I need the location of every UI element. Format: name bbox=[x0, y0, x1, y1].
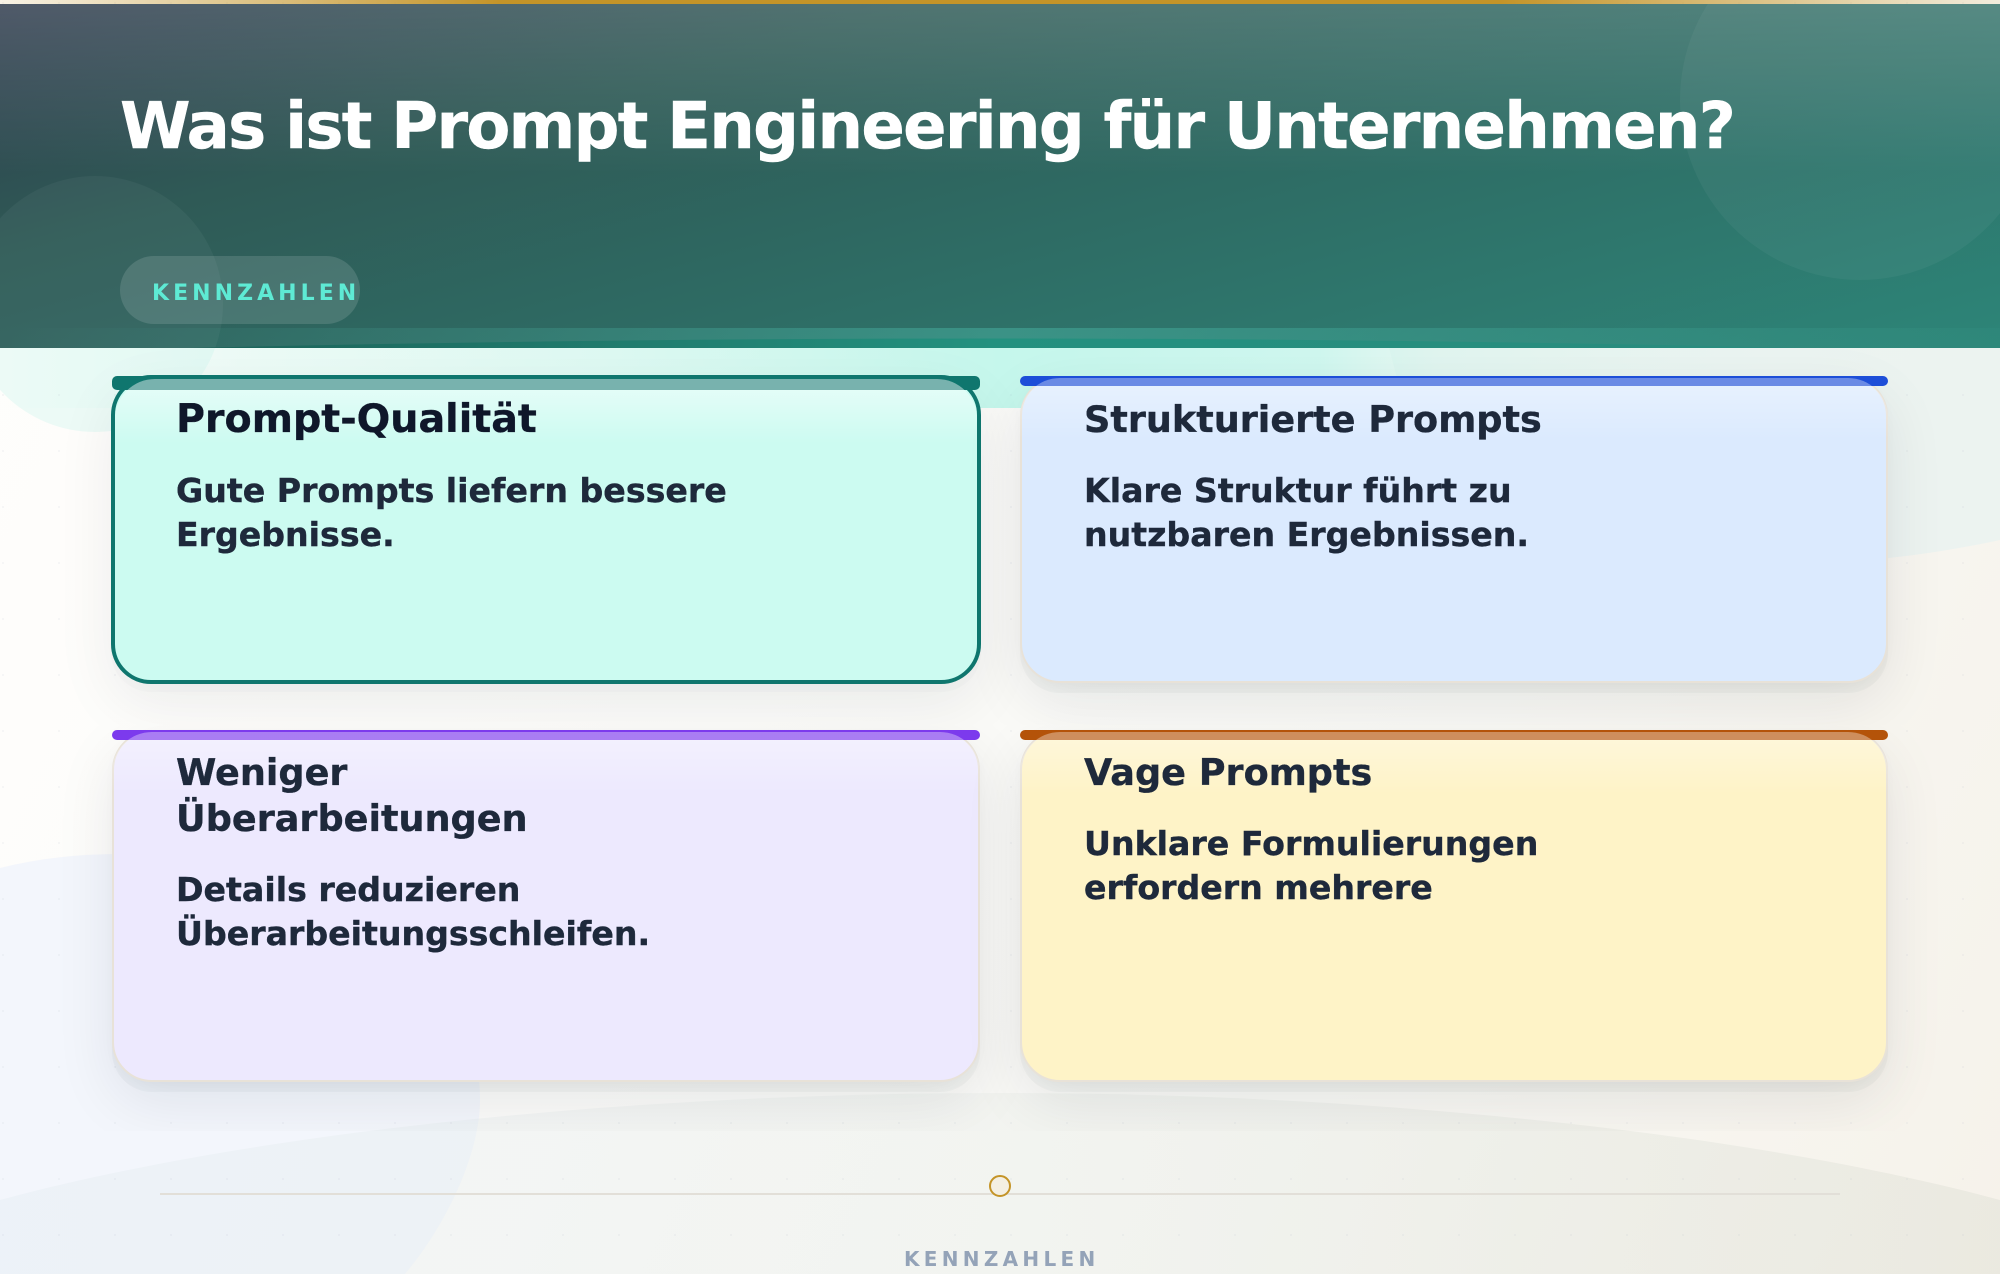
heading bbox=[176, 751, 528, 840]
title: Was ist Prompt Engineering für Unternehmen? bbox=[120, 90, 1734, 164]
text bbox=[176, 471, 727, 554]
header panel bbox=[0, 4, 2000, 348]
top accent bar bbox=[0, 0, 2000, 4]
text: Details reduzieren bbox=[176, 870, 520, 909]
heading: Vage Prompts bbox=[1084, 751, 1372, 794]
text: Ergebnisse. bbox=[176, 515, 395, 554]
text bbox=[1084, 471, 1529, 554]
row 1 bbox=[110, 375, 1895, 710]
text: Gute Prompts liefern bessere bbox=[176, 471, 727, 510]
footer divider bbox=[160, 1193, 1840, 1195]
tag pill bbox=[120, 256, 360, 324]
heading: Strukturierte Prompts bbox=[1084, 398, 1542, 441]
heading: Prompt-Qualität bbox=[176, 396, 537, 442]
text bbox=[176, 870, 650, 953]
footer ornament circle bbox=[989, 1175, 1011, 1197]
text: Überarbeitungsschleifen. bbox=[176, 914, 650, 953]
tag label: KENNZAHLEN bbox=[152, 281, 360, 306]
text: Klare Struktur führt zu bbox=[1084, 471, 1512, 510]
text bbox=[1084, 824, 1538, 907]
row 2 bbox=[105, 730, 1895, 1109]
heading: Überarbeitungen bbox=[176, 797, 528, 840]
text: Unklare Formulierungen bbox=[1084, 824, 1538, 863]
card: Strukturierte Prompts bbox=[1013, 376, 1895, 710]
heading: Weniger bbox=[176, 751, 347, 794]
footer label: KENNZAHLEN bbox=[904, 1247, 1100, 1271]
text: nutzbaren Ergebnissen. bbox=[1084, 515, 1529, 554]
card: Vage Prompts bbox=[1013, 730, 1895, 1109]
card: Weniger Überarbeitungen bbox=[105, 730, 987, 1109]
card: Prompt-Qualität bbox=[110, 375, 982, 704]
text: erfordern mehrere bbox=[1084, 868, 1433, 907]
